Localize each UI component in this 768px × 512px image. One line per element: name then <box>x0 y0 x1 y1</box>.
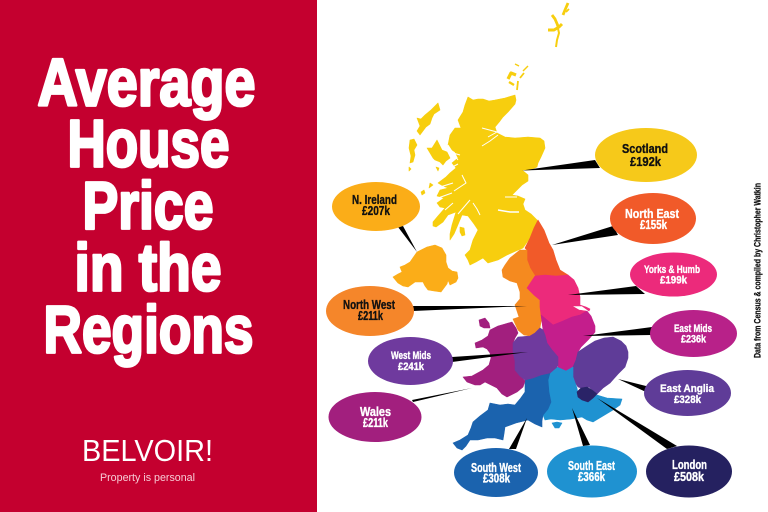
callout: Wales <box>328 388 472 442</box>
callout: Wales: £211k <box>363 416 388 430</box>
callout: N. Ireland: £207k <box>362 204 390 218</box>
callout: Wales: Wales <box>360 404 391 419</box>
title <box>38 46 256 368</box>
region: South West <box>453 373 551 450</box>
callout: West Mids <box>368 337 528 385</box>
region: Wales <box>463 318 525 397</box>
region: West Midlands <box>513 328 558 380</box>
callout: North West: North West <box>343 298 396 312</box>
callout: Scotland <box>522 128 697 182</box>
region: London <box>577 387 597 402</box>
logo: Belvoir: BELVOIR! <box>82 433 213 468</box>
logo: Belvoir <box>82 433 213 484</box>
callout: West Mids: £241k <box>398 361 425 373</box>
callout: Yorks and Humb: Yorks & Humb <box>644 264 700 276</box>
callout: East Mids: £236k <box>681 334 707 346</box>
region: South East <box>543 367 622 422</box>
callout: N. Ireland <box>332 182 420 252</box>
callout: London: £508k <box>674 470 704 484</box>
source credit: Data from Census & compiled by Christopher Watkin <box>752 183 762 358</box>
region: North West <box>502 250 542 336</box>
region: Yorkshire and Humber <box>527 275 590 325</box>
region: North East <box>525 220 568 276</box>
callout: Scotland: £192k <box>630 154 662 169</box>
callout: South East: South East <box>568 459 616 473</box>
callout: Yorks and Humb <box>568 252 717 296</box>
callout: London <box>597 398 732 498</box>
callout: Scotland: Scotland <box>622 141 668 156</box>
callout: East Anglia: £328k <box>674 394 702 406</box>
callout: West Mids: West Mids <box>391 350 431 362</box>
region: East Anglia <box>573 337 628 394</box>
callout: North West <box>326 286 527 336</box>
callout: East Mids <box>583 310 737 357</box>
callout: South West: £308k <box>483 472 510 486</box>
callout: South East: £366k <box>578 470 605 484</box>
logo: Belvoir: Property is personal <box>100 472 195 484</box>
title: Average <box>38 46 256 120</box>
callout: East Anglia <box>618 370 731 416</box>
callout: South West: South West <box>471 461 522 475</box>
title: in the <box>74 230 222 306</box>
panel: red title panel <box>0 0 317 512</box>
title: Regions <box>44 292 254 368</box>
callout: East Anglia: East Anglia <box>660 383 715 395</box>
region: Northern Ireland <box>393 245 458 292</box>
region: East Midlands <box>541 311 595 375</box>
title: Price <box>82 168 214 244</box>
region: Scotland <box>409 3 569 265</box>
title: House <box>68 106 230 182</box>
callout: North East: North East <box>625 206 680 221</box>
callout: N. Ireland: N. Ireland <box>352 193 397 207</box>
callout: South West <box>454 418 538 497</box>
region: Scottish sea lochs <box>438 128 519 215</box>
callout: North East <box>552 193 696 245</box>
callout: London: London <box>672 458 707 472</box>
map of UK regions <box>393 3 628 450</box>
callout: Yorks and Humb: £199k <box>660 274 688 286</box>
callout: East Mids: East Mids <box>674 323 712 335</box>
callout: South East <box>547 408 637 498</box>
callout: North East: £155k <box>640 218 667 232</box>
callout: North West: £211k <box>358 309 383 323</box>
